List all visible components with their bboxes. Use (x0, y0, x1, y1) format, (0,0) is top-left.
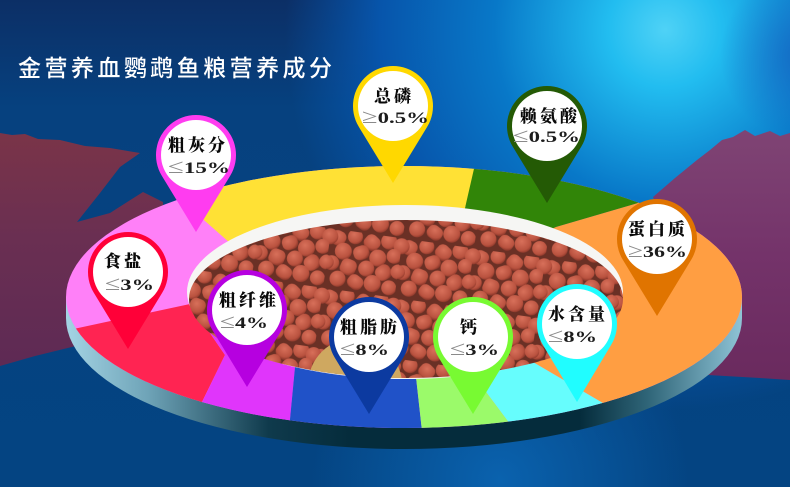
coin (310, 345, 402, 378)
pin: 水含量 (537, 284, 617, 402)
pin: 粗脂肪 (329, 297, 409, 414)
nutrient ring chart (66, 166, 742, 449)
pin: 粗灰分: ≤ 15% (168, 156, 230, 178)
pin: 食盐: ≤ 3% (105, 273, 154, 295)
pin: 粗灰分 (156, 115, 236, 232)
pin: 蛋白质 (617, 199, 697, 316)
pin: 粗脂肪: ≤ 8% (340, 338, 389, 360)
left fish silhouette (0, 133, 172, 366)
pin: 钙 (433, 297, 513, 414)
pin: 粗纤维: ≤ 4% (220, 311, 268, 333)
pin: 水含量: 水含量 (548, 304, 608, 324)
ring side wall (66, 187, 742, 449)
pin: 粗纤维: 粗纤维 (219, 290, 279, 310)
pin: 钙: ≤ 3% (450, 338, 499, 360)
title: 金营养血鹦鹉鱼粮营养成分 (18, 55, 332, 81)
pin: 水含量: ≤ 8% (548, 325, 597, 347)
fish food pellets (189, 220, 623, 378)
ring segments (66, 166, 742, 428)
pin: 粗纤维 (207, 270, 287, 387)
pin: 赖氨酸: ≤ 0.5% (513, 125, 580, 147)
bowl white rim (187, 205, 623, 379)
pin: 食盐: 食盐 (104, 251, 144, 271)
pin: 蛋白质: ≥ 36% (628, 240, 687, 262)
pin: 钙: 钙 (460, 317, 480, 337)
pin: 粗灰分: 粗灰分 (168, 135, 228, 155)
pin: 食盐 (88, 232, 168, 349)
pin: 赖氨酸 (507, 86, 587, 203)
pin: 总磷: ≥ 0.5% (362, 106, 429, 128)
pin: 粗脂肪: 粗脂肪 (340, 317, 400, 337)
pin: 总磷: 总磷 (374, 86, 414, 106)
pin: 蛋白质: 蛋白质 (628, 219, 688, 239)
right fish silhouette (653, 130, 790, 380)
pin: 总磷 (353, 66, 433, 183)
pin: 赖氨酸: 赖氨酸 (520, 106, 580, 126)
